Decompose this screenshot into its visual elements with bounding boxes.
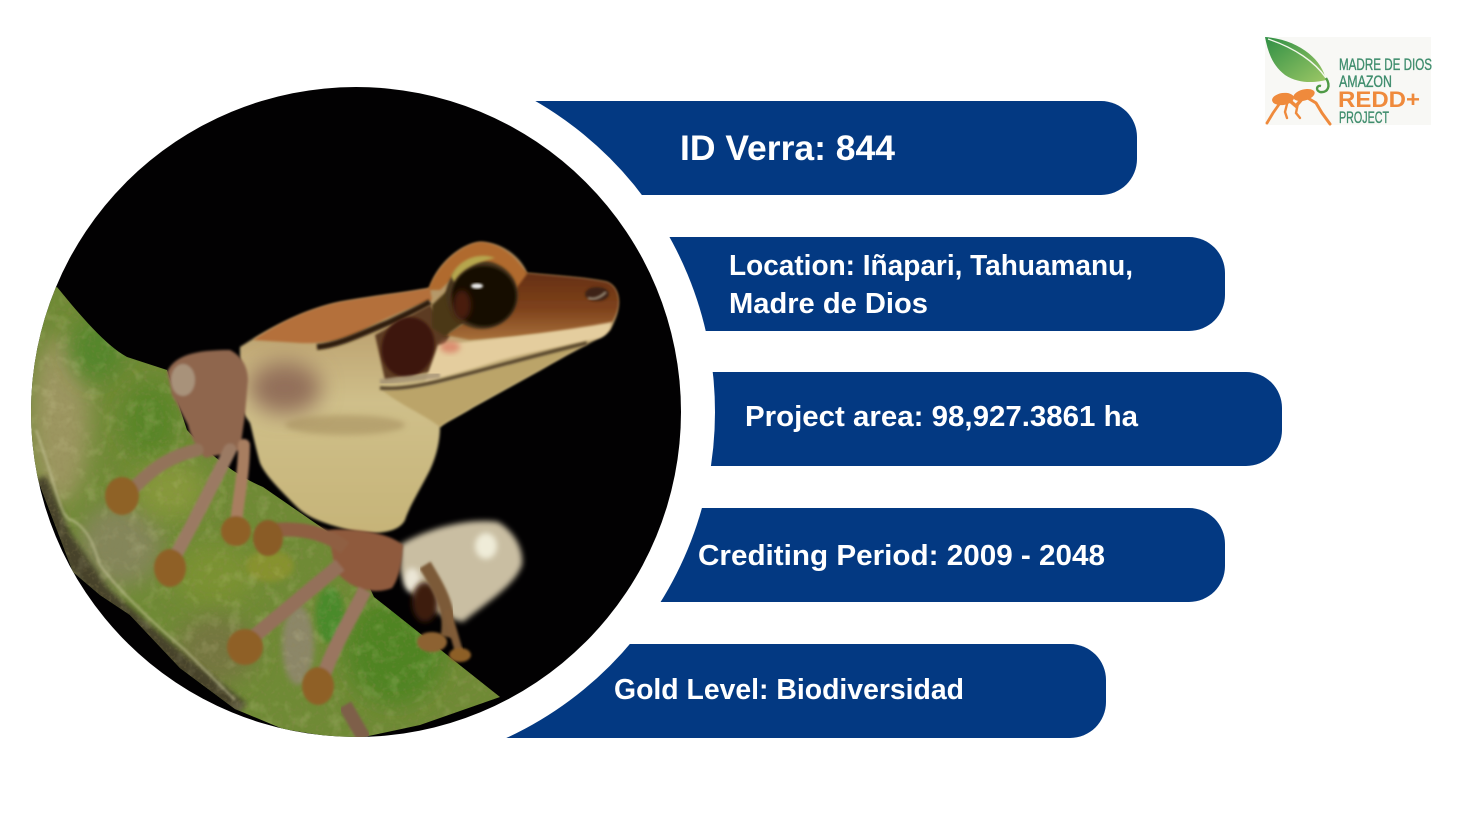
front left arm and toes (105, 350, 251, 587)
hind foot (400, 521, 522, 662)
head and torso silhouette (240, 242, 619, 533)
panel: crediting period pill (600, 508, 1225, 602)
panel: ID Verra pill (470, 101, 1137, 195)
back (253, 288, 432, 343)
label: gold level: Gold Level: Biodiversidad (614, 674, 964, 706)
mouth line (380, 343, 587, 388)
panel: gold level pill (440, 644, 1106, 738)
head top rim (428, 242, 527, 290)
logo text (1338, 56, 1432, 127)
icon: leaf (1265, 37, 1328, 92)
label: location: Madre de Dios (729, 288, 928, 320)
upper lip (425, 322, 612, 382)
icon: ant (1267, 87, 1330, 124)
front right arm and toes (227, 520, 403, 705)
band between ear and eye (432, 288, 468, 336)
snout (445, 262, 619, 340)
logo text: AMAZON (1339, 73, 1392, 91)
panel: project area pill (650, 372, 1282, 466)
photo: frog on branch (25, 87, 681, 740)
logo: Madre de Dios Amazon REDD+ Project (1265, 37, 1432, 127)
label: project area: Project area: 98,927.3861 ha (745, 401, 1139, 433)
ear region (375, 305, 450, 380)
panel: location pill (600, 237, 1225, 331)
logo text: PROJECT (1339, 109, 1389, 127)
branch (25, 280, 505, 740)
eardrum (380, 316, 436, 378)
white ring separating photo and pills (0, 53, 715, 771)
label: crediting period: Crediting Period: 2009 - 2048 (698, 540, 1105, 572)
label: location: Location: Iñapari, Tahuamanu, (729, 250, 1133, 282)
label: ID Verra: ID Verra: 844 (680, 129, 896, 168)
eye (446, 256, 518, 329)
nostril (585, 287, 609, 301)
jaw (382, 343, 587, 427)
logo text: REDD+ (1338, 87, 1420, 112)
